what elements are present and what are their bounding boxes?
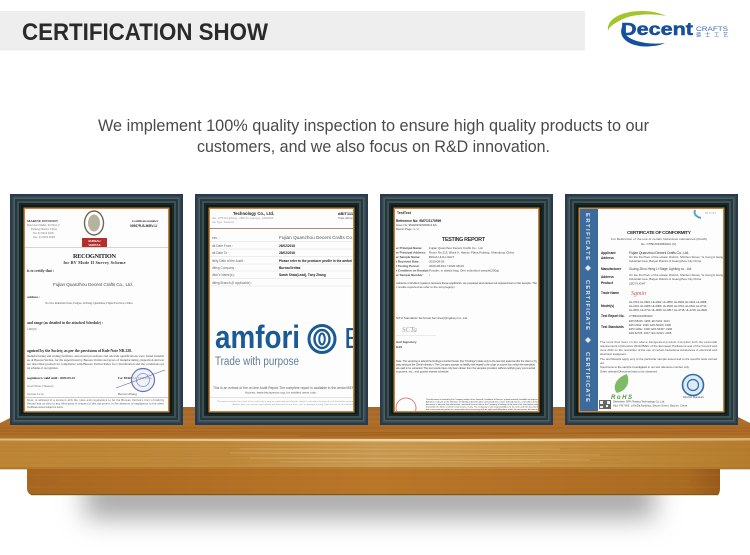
certificate content: Sgmin — [631, 291, 646, 297]
audit content: Trade with purp — [338, 217, 356, 220]
report content: ized Signatory — [396, 340, 417, 344]
certificate sidebar: ERTIFICATE — [584, 213, 590, 260]
audit content: 28/02/2018 — [279, 251, 295, 255]
intro text: customers, and we also focus on R&D innovation. — [197, 137, 550, 156]
audit content: Sarah Shao(Lead), Tony Zhang — [279, 273, 326, 277]
logo: Decent Crafts — [608, 11, 728, 46]
audit content: diting Branch (if applicable) : — [212, 281, 252, 285]
audit content: BureauVeritas — [279, 266, 301, 270]
audit content: dit Date To : — [212, 251, 229, 255]
certificate content: manufacturing and testing facilities, associated procedures and relevant qualifications were found suitable — [27, 354, 165, 359]
icon: RoHS leaf mark: RoHS — [611, 395, 632, 401]
audit content: dist : 1870 Dongzhang · 1880 St Legal type : 18000000 — [212, 217, 274, 220]
audit content: 26/02/2018 — [279, 244, 295, 248]
certificate content: LED FLIGHT — [629, 282, 646, 286]
certificate content: EPA 62705: 2007; IEC 62321: 2008 — [629, 331, 672, 335]
report content: t Testing Period: — [396, 264, 419, 268]
certificate content: RECOGNITION — [73, 253, 116, 260]
certificate content: EPN 55015: 1996; EN 5102: 2014 — [629, 319, 670, 323]
report content: exporters, etc., and quoted shared schedule. — [396, 370, 449, 374]
audit content: This is an extract of the on-line Audit Report.The complete report is available in the amfori BEPI — [213, 386, 355, 390]
logo: Decent Crafts: CRAFTS — [696, 27, 728, 33]
report content: 8-09 — [396, 345, 402, 349]
certificate content: 09967R-B-M/BV-LI — [130, 224, 157, 228]
certificate content: No.5xx, Industrial Zone, Fengze, Licheng, Quanzhou, Fujian Province, China. — [45, 301, 133, 306]
certificate content: Pudong District, China — [31, 227, 57, 231]
audit content: Technology Co., Ltd. — [233, 211, 274, 216]
certificate content: Trade Name — [601, 291, 619, 295]
certificate content: ral scheme of recognition. — [27, 366, 59, 370]
certificate content: out. — [600, 361, 605, 365]
amfori logo: Trade with purpose — [215, 356, 299, 368]
small print footer: document is advised that information contained hereon reflects the Company's findings at the time of its intervention only — [426, 403, 539, 406]
audit content: dit Date From : — [212, 244, 233, 248]
shadow below shelf — [85, 480, 655, 518]
certificate content: and range (as detailed in the attached Schedule) : — [27, 321, 103, 325]
certificate content: The tests that meet on the above designated product Complies with the essential — [600, 340, 717, 344]
certificate content: Manufacturer — [601, 267, 622, 271]
icon: blue round seal: Director Signature — [683, 395, 704, 399]
certificate content: HL-0515, HL-0714, HL-0818, HL-0817, HL-0718, HL-0718, HL-0920 — [629, 308, 707, 312]
certificate content: requirements of Directive 2011/65/EU of the European Parliament and of the Council and — [600, 344, 717, 348]
report content: BOGA HUA LIGHT — [429, 255, 454, 259]
certificate content — [599, 210, 723, 409]
certificate content: Specimens to the sample investigated in our test reference number only. — [600, 365, 690, 369]
shelf front edge — [0, 438, 750, 470]
certificate content: cognition is valid until : 2009-09-25 — [27, 376, 75, 380]
audit content: dBIT1112 — [338, 211, 356, 216]
amfori logo: amfori — [215, 319, 300, 355]
report content: er Sample Number: — [396, 273, 424, 277]
certificate content: Industrial zone, Baiyun District of Guangzhou City China — [629, 259, 701, 263]
amfori logo — [215, 324, 353, 368]
report content: / — [429, 273, 430, 277]
certificate frame 2: amfori audit — [195, 194, 368, 425]
certificate content: HL-0719, HL-0821, HL-0902, HL-0803, HL-0904, HL-0916, HL-0908, — [629, 300, 707, 304]
report content: Reference No: 9M7CS179599 — [396, 219, 441, 223]
small print footer: does not exonerate parties to a transaction from exercising all their rights and obligations under the transaction documents — [426, 408, 538, 411]
shelf lower support — [27, 469, 720, 495]
report content: t Received Date: — [396, 260, 419, 264]
audit content: lidity Date of the Audit : — [212, 259, 245, 263]
icon: round stamp — [116, 368, 165, 392]
report content: er Principal Address: — [396, 250, 426, 254]
report content: Room No.213, Block A, Haoxin Plaza,Putiang, Shandong, China — [429, 250, 514, 254]
certificate content: On the first floor of the estate: District, Shichen Street, Ye Gong A Gang — [629, 255, 723, 259]
audit content: Amfori does not accept any liability whatsoever for any loss, cost or damage arising from the use of this extract — [233, 403, 353, 406]
audit content: Access: www.bscisystem.org, for entitled users only. — [245, 390, 317, 394]
report content: SCTa — [402, 326, 417, 334]
certificate content: IN TI ST — [705, 211, 716, 215]
icon: red round stamp — [396, 398, 416, 411]
small print footer: This document is issued by the Company subject to its General Conditions of Service, printed overleaf, available on request. — [426, 398, 538, 401]
certificate content: address : — [27, 295, 40, 299]
certificate content: Shenzhen SPN Testing Technology Co.,Ltd. — [613, 400, 665, 404]
certificate content: Veritas has no duty to any third party in respect of this document, in the absence of negligence to the client — [27, 402, 164, 406]
certificate content: CTBF2019050202 — [629, 314, 653, 318]
audit content: ditor's Name(s) : — [212, 273, 235, 277]
certificate content: Rue Henri Mallet, 3rd floor 3 — [27, 223, 60, 227]
certificate content: Cecil Zhao (Taiwan) — [27, 384, 54, 388]
certificate content: Fujian Quanzhou Decent Crafts Co., Ltd. — [53, 282, 133, 288]
report content: SITU Standards Technical Services(Qingdao) Co.,Ltd. — [396, 316, 468, 320]
report content: er Sample Name: — [396, 255, 420, 259]
certificate content: Test Standards — [601, 325, 624, 329]
logo: Decent Crafts: Decent — [621, 19, 693, 39]
certificate content: CERTIFICATE OF CONFORMITY — [627, 230, 692, 236]
certificate content: Certificate number — [132, 219, 159, 223]
report content: Fujian Quanzhou Decent Crafts Co., Ltd. — [429, 246, 483, 250]
certificate content: EPN 1199x: 1996; EPA 56457: 1996 — [629, 327, 673, 331]
certificate sidebar: CERTIFICATE — [584, 280, 590, 330]
report content: er Principal Name: — [396, 246, 422, 250]
icon: Bureau Veritas emblem: BUREAU — [89, 239, 100, 243]
icon: blue round seal — [682, 374, 704, 399]
shelf top surface — [0, 407, 750, 439]
icon: Bureau Veritas emblem — [82, 211, 107, 247]
certificate content — [25, 211, 168, 409]
certificate content: is to certify that : — [27, 269, 54, 273]
report content — [396, 211, 539, 418]
certificate content: Note: is advised of a concern with the rules and regulations to be the Bureau Veritas's limit of liability — [27, 398, 165, 402]
header band — [0, 11, 585, 50]
report content: Note: The sampling is at/and the findings recorded herein (the "Findings") relate only to the items(s) tested and/or the client or by — [396, 359, 538, 363]
small print footer — [426, 398, 539, 411]
audit content: Fujian Quanzhou Decent Crafts Co., Ltd. — [279, 235, 364, 240]
certificate frame 4: certificate of conformity — [565, 194, 738, 425]
certificate content: Add: F6/7/8/9, LiXinDa Building, Shiyan Street, Bao'an, China — [613, 404, 688, 408]
certificate content: Other relevant Directives have to be observed — [600, 370, 657, 374]
report content: are said to be extracted. The test results have only been drawn from the samples provided, without certifying any commercial — [396, 366, 535, 370]
certificate content: Fujian Quanzhou Decent Crafts Co., Ltd. — [629, 251, 689, 255]
report content: TESTING REPORT — [442, 237, 486, 243]
certificate content: au of Bureau Veritas, for the supervision by Bureau Veritas surveyors of manufacturing, inspection and test — [27, 358, 164, 363]
certificate content: Lamps — [27, 327, 37, 331]
certificate content: Bennet Zhang — [118, 392, 137, 396]
certificate content: MARINE DIVISION — [27, 219, 58, 223]
certificate content: On the first floor of the estate: District, Shichen Street, Ye Gong A Gang — [629, 273, 723, 277]
icon: QR code — [599, 400, 611, 409]
certificate content: ognized by the Society, as per the provisions of Rule Note NR.320. — [27, 348, 132, 353]
certificate frame 1: Bureau Veritas recognition — [10, 194, 183, 425]
audit content — [210, 211, 366, 406]
report content: Powder, in plastic bag, One submitted sample(200g) — [429, 268, 499, 272]
certificate content: No. CTBF2019050202 (S) — [641, 242, 676, 246]
report content: Report Page: 1 / 2 — [396, 227, 419, 231]
certificate content: EPN 2002: 1996; EPA 56460: 1996 — [629, 323, 671, 327]
certificate content: Model(s) — [601, 304, 614, 308]
icon: RoHS leaf mark — [611, 374, 632, 401]
report content: Advance until client systems receives these applicants, we prepared and carried out required test on the sample. The — [396, 281, 537, 285]
intro text: We implement 100% quality inspection to ensure high quality products to our — [98, 116, 649, 135]
certificate content: For BUREAU VERITAS — [118, 376, 152, 380]
certificate content: are described products in compliance with Bureau Veritas Rules for Classification and the conditions set — [27, 362, 164, 366]
small print footer: and within the limits of client's instructions, if any. The Company's sole responsibility is to its client and this document — [426, 406, 538, 408]
report content: party acting at the Client's direction. The Company accepts no liability with regard to the origin or source from which the sample(s) — [396, 362, 535, 366]
certificate content: June 2011 on the restriction of the use of certain hazardous substances in electrical and — [600, 348, 717, 352]
audit content: ess : — [212, 236, 219, 240]
certificate content: Fax: 21 5212 3138 — [33, 235, 55, 239]
certificate content: electronic equipment. — [600, 352, 627, 356]
certificate content: Guang Zhou Heng Li Stage Lighting co., Ltd. — [629, 267, 692, 271]
report content: 2020-08-05 — [429, 260, 445, 264]
audit content: site Type : Factored — [212, 221, 235, 224]
report content: t results reported as refer to the test page(s). — [396, 285, 456, 289]
certificate content: Product — [601, 281, 614, 285]
report content: Issue No: 9M2W2020000614 ES — [396, 223, 437, 227]
title: CERTIFICATION SHOW — [22, 19, 268, 46]
certificate content: Tel: 21 5212 3118 — [33, 231, 54, 235]
certificate content: Industrial zone, Baiyun District of Guangzhou City China — [629, 277, 701, 281]
certificate content: Certificate issued subject to terms. — [27, 406, 64, 409]
certificate content: Address — [601, 256, 614, 260]
certificate sidebar: CERTIFICATE — [584, 352, 590, 402]
certificate content: Address — [601, 275, 614, 279]
certificate sidebar — [580, 209, 598, 411]
intro text — [98, 116, 649, 156]
report content: t Condition on Receipt: — [396, 268, 429, 272]
logo: Decent Crafts: 德士工艺 — [696, 32, 728, 38]
certificate frame 3: testing report — [380, 194, 553, 425]
certificate content: The test Results apply only to the particular sample tested and to the specific tests carried — [600, 357, 717, 361]
certificate content: Applicant — [601, 251, 616, 255]
audit content: The report contains the result of the audit which may be replicated and shared, subject to the data sharing rules of the amfori system — [217, 400, 353, 403]
wooden shelf — [0, 407, 750, 495]
amfori logo: E — [344, 323, 363, 355]
small print footer: Attention is drawn to the limitation of liability, indemnification and jurisdiction issues defined therein, any holder of this — [426, 400, 538, 404]
certificate content: Test Report No. — [601, 314, 625, 318]
certificate content: HL-1001, HL-0905, HL-0906, HL-0918, HL-0710, HL-0611, HL-0712, — [629, 304, 707, 308]
icon: Bureau Veritas emblem: VERITAS — [89, 243, 101, 247]
report content: TestTest — [397, 211, 412, 215]
certificate content: for BV Mode II Survey Scheme — [64, 260, 126, 265]
audit content: diting Company : — [212, 266, 236, 270]
audit content: Please refer to the producer profile in the amfori platform — [279, 259, 366, 263]
certificate content: For Restriction of the use of certain hazardous substances (RoHS) — [611, 237, 707, 241]
certificate content: bureau.bv.cn — [27, 392, 44, 396]
report content: 2020-08-021 / 2020-08-06 — [429, 264, 464, 268]
